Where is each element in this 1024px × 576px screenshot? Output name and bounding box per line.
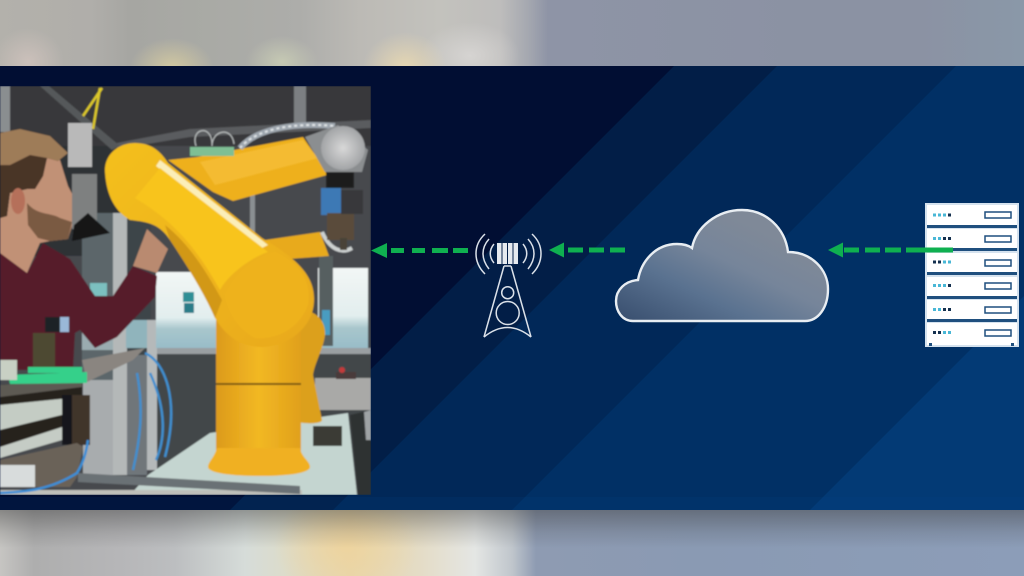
mast [484, 266, 531, 337]
icon: server rack [925, 203, 1019, 347]
icon: cell tower [476, 234, 541, 337]
photo: engineer and yellow robot arm [0, 86, 371, 495]
server unit 5 [927, 300, 1017, 322]
navy diagonal background panel [0, 66, 1024, 510]
rear robot arm segment [168, 137, 352, 260]
second robot behind [298, 310, 325, 423]
arrow: servers to cloud [828, 242, 953, 258]
antenna block [497, 243, 518, 264]
cabling and tool on left [68, 88, 171, 470]
windows [82, 256, 371, 354]
server unit 1 [927, 205, 1017, 228]
counter and table [0, 367, 371, 495]
signal arcs [476, 234, 541, 274]
server unit 4 [927, 277, 1017, 299]
main robot arm [105, 143, 314, 347]
server unit 2 [927, 229, 1017, 251]
factory background [0, 86, 371, 495]
workbench rails and green parts [0, 348, 145, 493]
server unit 3 [927, 253, 1017, 275]
arrow: cloud to tower [549, 242, 625, 258]
robot head [305, 125, 368, 250]
arrow: tower to robot [371, 243, 468, 258]
cables and green connector [190, 125, 335, 156]
main diagram [0, 66, 1024, 510]
icon: cloud [616, 210, 828, 321]
server unit 6 [927, 323, 1017, 346]
robot base [208, 320, 310, 476]
blurred bottom band [0, 510, 1024, 576]
engineer [0, 129, 168, 370]
blurred top band [0, 0, 1024, 66]
